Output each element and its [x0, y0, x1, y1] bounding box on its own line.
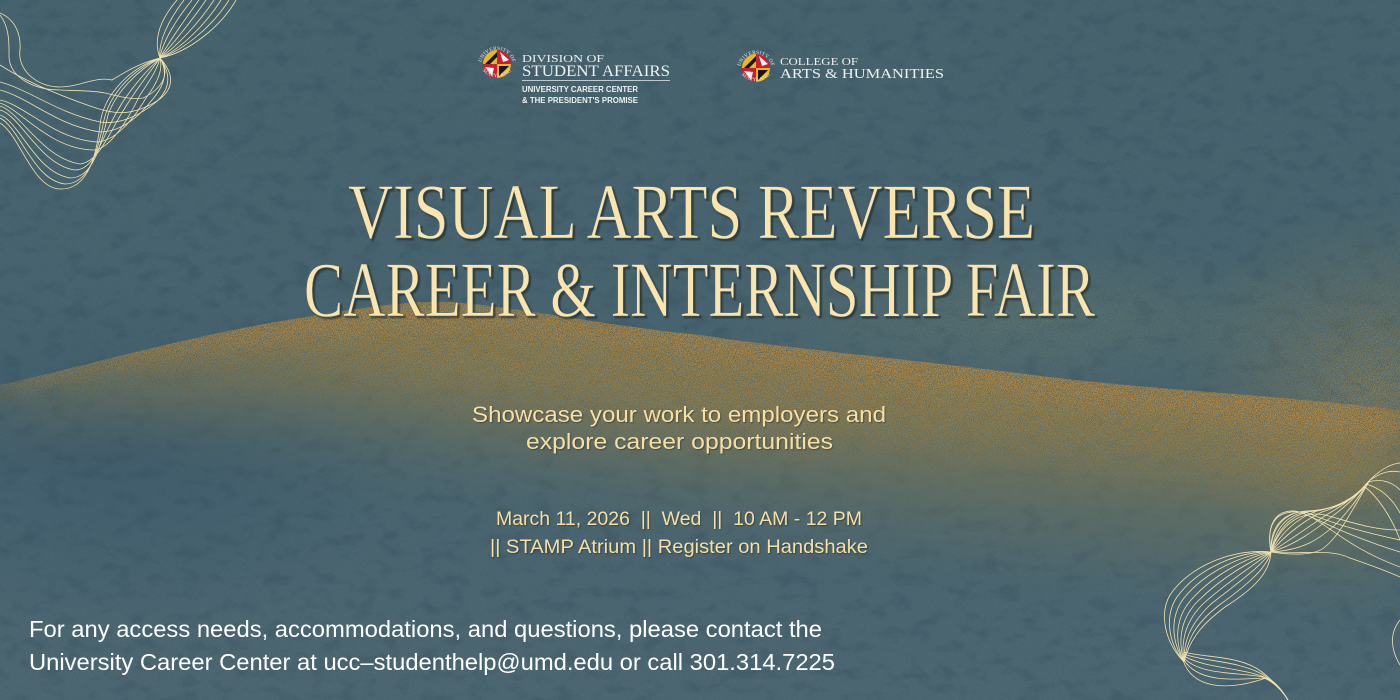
- seal: [478, 46, 516, 78]
- title: CAREER & INTERNSHIP FAIR: [304, 246, 1095, 333]
- wordmark: UNIVERSITY CAREER CENTER: [522, 85, 638, 94]
- contact note: University Career Center at ucc–studenthelp@umd.edu or call 301.314.7225: [29, 649, 835, 675]
- ribbon right fan: [1270, 463, 1400, 665]
- wordmark: ARTS & HUMANITIES: [780, 67, 944, 82]
- contact note: [29, 616, 835, 675]
- ribbon: top-left line wave: [0, 0, 236, 189]
- wordmark: & THE PRESIDENT'S PROMISE: [522, 96, 639, 105]
- seal: UNIVERSITY OF: [478, 46, 516, 62]
- ribbon top fan: [157, 0, 236, 58]
- subtitle: Showcase your work to employers and: [472, 402, 886, 427]
- title: VISUAL ARTS REVERSE: [348, 168, 1035, 255]
- sand dune: [0, 200, 1400, 580]
- event details: || STAMP Atrium || Register on Handshake: [490, 536, 868, 558]
- event details: [490, 508, 868, 558]
- logo: Division of Student Affairs: [478, 46, 670, 105]
- ribbon bottom tail: [1183, 652, 1288, 700]
- subtitle: explore career opportunities: [526, 429, 833, 454]
- seal: [737, 50, 775, 82]
- seal: MARYLAND: [482, 68, 510, 78]
- seal: UNIVERSITY OF: [737, 50, 775, 66]
- contact note: For any access needs, accommodations, and questions, please contact the: [29, 616, 822, 642]
- seal: MARYLAND: [742, 72, 770, 82]
- logo: College of Arts & Humanities: [737, 50, 944, 82]
- title: [304, 168, 1095, 333]
- wordmark: DIVISION OF: [522, 53, 604, 65]
- wordmark: [780, 56, 944, 82]
- subtitle: [472, 402, 886, 454]
- wordmark: COLLEGE OF: [780, 56, 858, 68]
- wordmark: STUDENT AFFAIRS: [522, 63, 670, 80]
- ribbon lower loops: [0, 13, 171, 189]
- glow above ridge on the right: [700, 200, 1400, 580]
- wordmark: [522, 53, 670, 105]
- ribbon: bottom-right line wave: [1164, 463, 1400, 700]
- ribbon arcs: [1164, 551, 1271, 662]
- event details: March 11, 2026 || Wed || 10 AM - 12 PM: [496, 508, 862, 530]
